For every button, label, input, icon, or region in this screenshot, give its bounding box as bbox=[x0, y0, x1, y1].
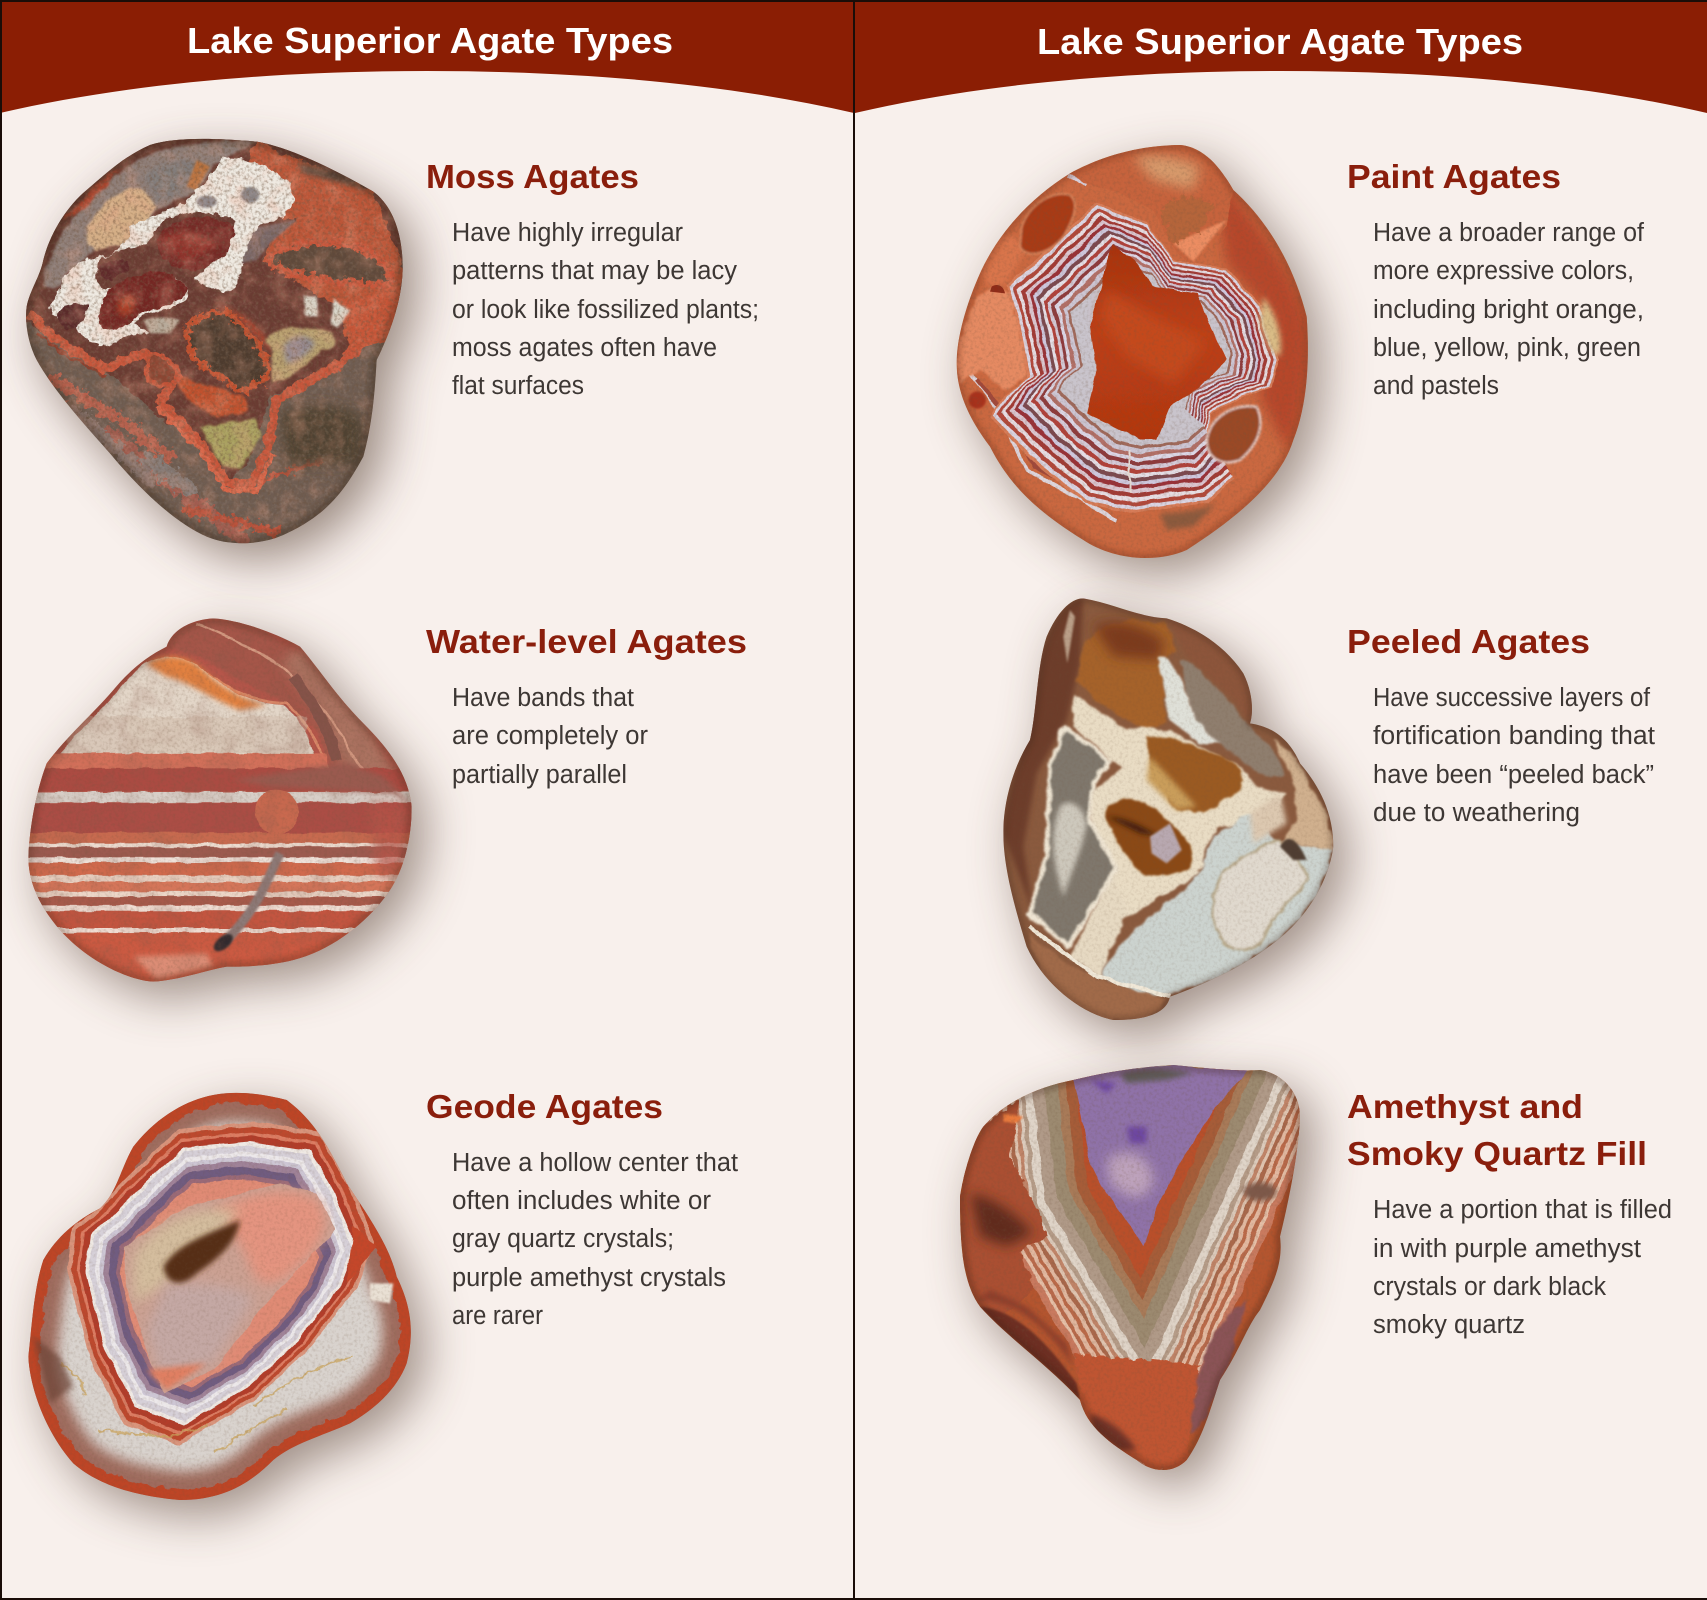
agate entry: amethyst and smoky quartz fill bbox=[940, 1030, 1672, 1490]
panel: right agate types bbox=[855, 0, 1707, 1490]
icon: geode agate rock bbox=[0, 1070, 430, 1520]
agate entry: paint bbox=[940, 130, 1645, 574]
description: water-level agates: partially parallel bbox=[452, 761, 627, 789]
description: geode agates: purple amethyst crystals bbox=[452, 1264, 726, 1292]
icon: amethyst agate rock bbox=[940, 1030, 1320, 1490]
heading: paint agates: Paint Agates bbox=[1347, 158, 1561, 195]
heading: geode agates: Geode Agates bbox=[426, 1088, 663, 1125]
description: paint agates: blue, yellow, pink, green bbox=[1373, 334, 1641, 362]
description: geode agates: often includes white or bbox=[452, 1187, 712, 1215]
description: water-level agates bbox=[452, 684, 648, 789]
description: amethyst and smoky quartz fill: smoky quartz bbox=[1373, 1311, 1525, 1339]
agate entry: geode bbox=[0, 1070, 738, 1520]
description: amethyst and smoky quartz fill: crystals or dark black bbox=[1373, 1273, 1606, 1301]
description: paint agates bbox=[1373, 219, 1645, 400]
panel: left agate types bbox=[0, 0, 854, 1520]
description: peeled agates: have been “peeled back” bbox=[1373, 761, 1654, 789]
description: moss agates: or look like fossilized plants; bbox=[452, 296, 759, 324]
description: paint agates: Have a broader range of bbox=[1373, 219, 1645, 247]
description: amethyst and smoky quartz fill: in with purple amethyst bbox=[1373, 1235, 1641, 1263]
agate entry: peeled bbox=[980, 580, 1655, 1040]
description: moss agates: flat surfaces bbox=[452, 372, 584, 400]
heading: amethyst and smoky quartz fill bbox=[1347, 1088, 1647, 1172]
header banner: left bbox=[0, 0, 854, 113]
description: moss agates bbox=[452, 219, 759, 400]
title: right: Lake Superior Agate Types bbox=[1037, 21, 1523, 62]
heading: water-level agates: Water-level Agates bbox=[426, 623, 747, 660]
description: peeled agates: due to weathering bbox=[1373, 799, 1580, 827]
heading: amethyst and smoky quartz fill: Smoky Quartz Fill bbox=[1347, 1135, 1647, 1172]
description: peeled agates bbox=[1373, 684, 1655, 827]
agate entry: moss bbox=[10, 120, 759, 560]
description: geode agates: Have a hollow center that bbox=[452, 1149, 738, 1177]
description: peeled agates: Have successive layers of bbox=[1373, 684, 1651, 712]
description: geode agates bbox=[452, 1149, 738, 1330]
description: water-level agates: are completely or bbox=[452, 722, 648, 750]
title: left: Lake Superior Agate Types bbox=[187, 20, 673, 61]
description: paint agates: including bright orange, bbox=[1373, 296, 1644, 324]
agate entry: water-level bbox=[0, 590, 747, 1010]
description: moss agates: Have highly irregular bbox=[452, 219, 684, 247]
icon: paint agate rock bbox=[940, 130, 1340, 574]
description: peeled agates: fortification banding that bbox=[1373, 722, 1655, 750]
heading: amethyst and smoky quartz fill: Amethyst and bbox=[1347, 1088, 1583, 1125]
description: amethyst and smoky quartz fill bbox=[1373, 1196, 1672, 1339]
description: paint agates: and pastels bbox=[1373, 372, 1499, 400]
description: amethyst and smoky quartz fill: Have a portion that is filled bbox=[1373, 1196, 1672, 1224]
heading: moss agates: Moss Agates bbox=[426, 158, 639, 195]
heading: peeled agates: Peeled Agates bbox=[1347, 623, 1590, 660]
description: moss agates: moss agates often have bbox=[452, 334, 717, 362]
description: geode agates: are rarer bbox=[452, 1302, 543, 1330]
description: paint agates: more expressive colors, bbox=[1373, 257, 1634, 285]
icon: peeled agate rock bbox=[980, 580, 1350, 1040]
description: water-level agates: Have bands that bbox=[452, 684, 634, 712]
icon: water-level agate rock bbox=[0, 590, 430, 1010]
description: moss agates: patterns that may be lacy bbox=[452, 257, 737, 285]
header banner: right bbox=[855, 0, 1707, 113]
description: geode agates: gray quartz crystals; bbox=[452, 1225, 674, 1253]
icon: moss agate rock bbox=[10, 120, 420, 560]
